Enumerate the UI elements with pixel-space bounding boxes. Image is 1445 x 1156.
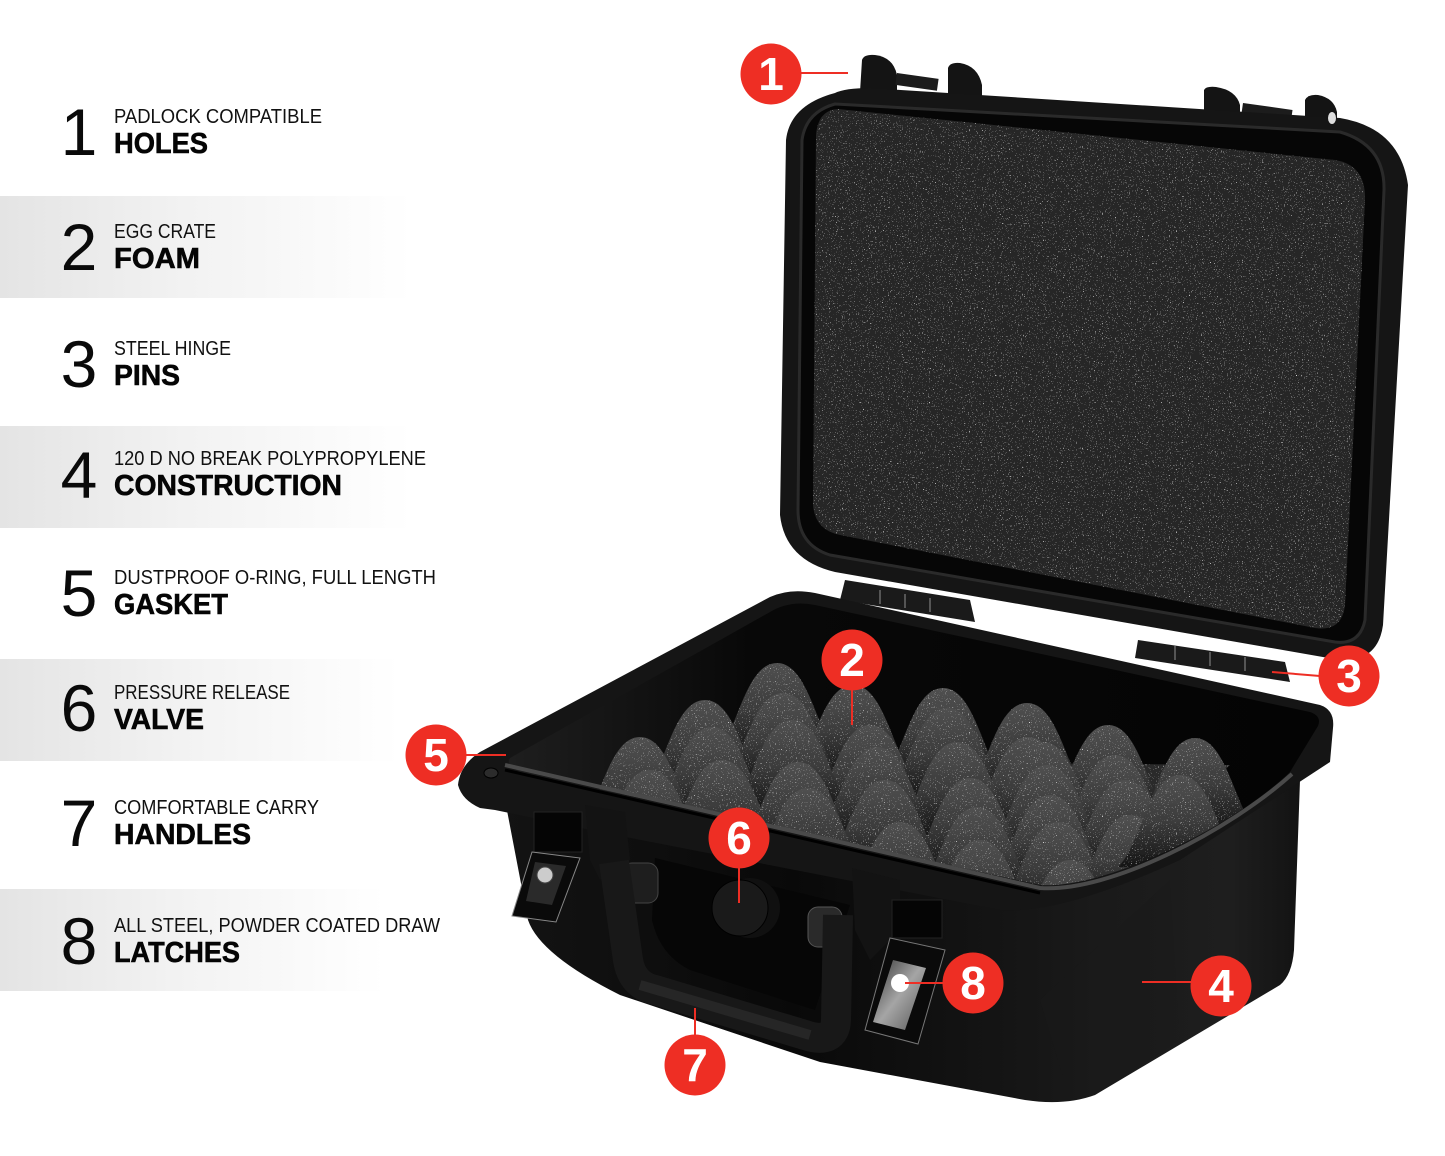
row 2: egg crate foam <box>0 196 412 298</box>
row 1: padlock holes: 1 <box>61 95 97 169</box>
callout 1 <box>740 44 848 104</box>
callout 8: 8 <box>960 957 986 1009</box>
case body <box>505 755 1330 1102</box>
right latch <box>865 900 945 1044</box>
row 7: carry handles: COMFORTABLE CARRY <box>114 797 319 819</box>
row 5: gasket: DUSTPROOF O-RING, FULL LENGTH <box>114 567 436 589</box>
row 2: egg crate foam: EGG CRATE <box>114 221 216 243</box>
row 8: draw latches: ALL STEEL, POWDER COATED DRAW <box>114 915 440 937</box>
lid <box>780 55 1408 660</box>
rim <box>458 591 1333 910</box>
row 7: carry handles: HANDLES <box>114 819 251 851</box>
rim highlight <box>505 765 1292 888</box>
flange hole <box>484 768 498 778</box>
row 1: padlock holes <box>61 95 322 169</box>
row 6: pressure release valve: 6 <box>61 671 97 745</box>
right corner shading <box>1040 880 1180 1100</box>
callout 7: 7 <box>682 1039 708 1091</box>
row 3: steel hinge pins: 3 <box>61 327 97 401</box>
row 2: egg crate foam: 2 <box>61 210 97 284</box>
row 2: egg crate foam: FOAM <box>114 243 200 275</box>
legend list <box>0 95 440 991</box>
row 5: gasket: 5 <box>61 556 97 630</box>
row 5: gasket <box>61 556 436 630</box>
callout 4 <box>1142 956 1252 1016</box>
lid shell <box>780 88 1408 660</box>
egg crate foam <box>600 663 1243 886</box>
callout 2 <box>822 630 882 725</box>
row 4: construction: 4 <box>61 438 97 512</box>
callout 7 <box>664 1008 726 1096</box>
front guard blocks <box>585 805 900 960</box>
row 8: draw latches <box>0 889 440 991</box>
row 8: draw latches: LATCHES <box>114 937 240 969</box>
row 7: carry handles <box>61 786 319 860</box>
callout 5 <box>406 724 506 786</box>
row 3: steel hinge pins: STEEL HINGE <box>114 338 231 360</box>
row 6: pressure release valve: PRESSURE RELEASE <box>114 682 290 704</box>
lid gasket channel <box>798 104 1384 642</box>
interior well <box>509 604 1319 885</box>
base hinges <box>840 580 1290 682</box>
callout 4: 4 <box>1208 960 1234 1012</box>
callout 6 <box>708 808 770 903</box>
row 8: draw latches: 8 <box>61 904 97 978</box>
row 7: carry handles: 7 <box>61 786 97 860</box>
row 5: gasket: GASKET <box>114 589 228 621</box>
case illustration <box>406 44 1408 1102</box>
valve <box>712 878 780 938</box>
handle highlight <box>640 985 810 1035</box>
row 1: padlock holes: PADLOCK COMPATIBLE <box>114 106 322 128</box>
row 3: steel hinge pins: PINS <box>114 360 180 392</box>
lid lugs and top hinges <box>860 55 1337 132</box>
row 4: construction: 120 D NO BREAK POLYPROPYLENE <box>114 448 426 470</box>
row 3: steel hinge pins <box>61 327 231 401</box>
callout 8 <box>905 952 1004 1014</box>
handle pivots <box>622 863 842 947</box>
callout 3: 3 <box>1336 650 1362 702</box>
front recess <box>652 858 850 1010</box>
padlock hole <box>846 66 856 80</box>
callout 1: 1 <box>758 48 784 100</box>
row 6: pressure release valve <box>0 659 400 761</box>
left latch <box>512 812 582 922</box>
lid foam panel <box>813 109 1365 629</box>
carry handle <box>614 862 838 1038</box>
callout 3 <box>1272 646 1380 706</box>
callout 5: 5 <box>423 729 449 781</box>
callout 6: 6 <box>726 812 752 864</box>
callout 2: 2 <box>839 634 865 686</box>
row 6: pressure release valve: VALVE <box>114 704 204 736</box>
row 4: construction <box>0 426 426 528</box>
row 4: construction: CONSTRUCTION <box>114 470 342 502</box>
row 1: padlock holes: HOLES <box>114 128 208 160</box>
